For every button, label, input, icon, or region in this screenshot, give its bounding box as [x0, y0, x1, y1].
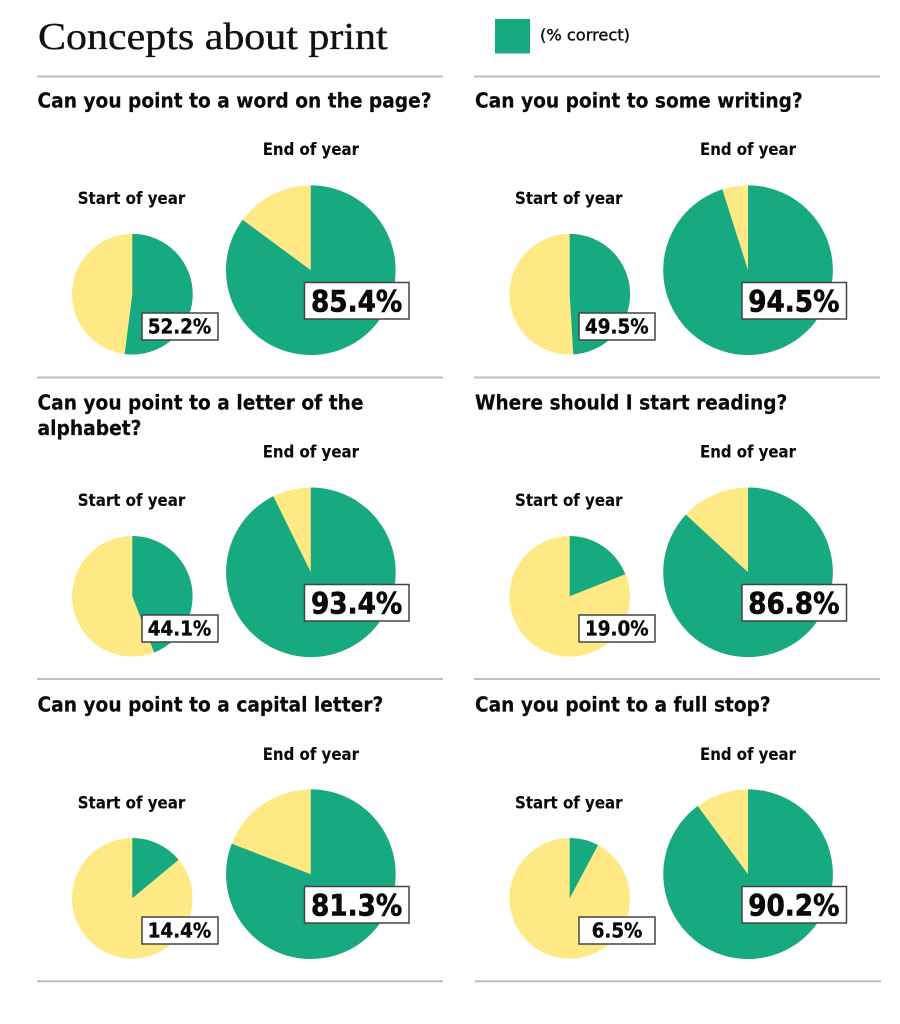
start of year label: Start of year	[515, 491, 623, 511]
heading: Can you point to a letter of the	[38, 391, 364, 415]
value: 14.4%: 14.4%	[148, 918, 211, 942]
end of year pie chart	[663, 789, 833, 959]
value: 94.5%: 94.5%	[748, 285, 840, 319]
end of year label: End of year	[700, 745, 797, 765]
value: 93.4%: 93.4%	[311, 587, 402, 621]
panel: word on the page	[38, 88, 432, 355]
heading: Can you point to a capital letter?	[38, 692, 383, 716]
end of year label: End of year	[700, 442, 797, 462]
start of year pie chart	[509, 234, 630, 354]
end of year pie chart	[663, 185, 833, 355]
end of year label: End of year	[263, 140, 360, 160]
end of year pie chart	[226, 789, 396, 959]
end of year pie chart	[663, 487, 833, 657]
legend: (% correct)	[540, 26, 630, 44]
heading: Can you point to some writing?	[475, 88, 803, 112]
panel: where to start reading	[475, 391, 846, 657]
legend	[495, 19, 630, 54]
end of year label: End of year	[700, 140, 797, 160]
value: 49.5%: 49.5%	[585, 314, 649, 338]
start of year label: Start of year	[78, 189, 186, 209]
heading: Where should I start reading?	[475, 391, 787, 415]
end of year label: End of year	[263, 745, 360, 765]
value: 86.8%: 86.8%	[748, 587, 840, 621]
panel: some writing	[475, 88, 846, 355]
value: 90.2%: 90.2%	[748, 889, 840, 923]
start of year label: Start of year	[515, 189, 623, 209]
panel: capital letter	[38, 692, 409, 959]
value: 85.4%: 85.4%	[311, 285, 402, 319]
value: 81.3%: 81.3%	[311, 889, 402, 923]
value: 52.2%: 52.2%	[148, 314, 211, 338]
start of year pie chart	[509, 838, 630, 959]
end of year pie chart	[226, 185, 396, 355]
value: 6.5%: 6.5%	[592, 918, 642, 942]
title: Concepts about print	[38, 16, 388, 58]
start of year label: Start of year	[515, 793, 623, 813]
heading: Can you point to a word on the page?	[38, 88, 432, 112]
value: 6.5%	[579, 917, 655, 944]
value: 44.1%: 44.1%	[148, 616, 211, 640]
start of year pie chart	[72, 838, 193, 959]
end of year label: End of year	[263, 442, 360, 462]
start of year pie chart	[72, 234, 193, 354]
end of year pie chart	[226, 487, 396, 657]
start of year pie chart	[509, 536, 630, 657]
value: 19.0%: 19.0%	[585, 616, 649, 640]
start of year pie chart	[72, 536, 193, 657]
panel: full stop	[475, 692, 846, 959]
heading: Can you point to a full stop?	[475, 692, 771, 716]
panel: letter of the alphabet	[38, 391, 409, 657]
start of year label: Start of year	[78, 793, 186, 813]
start of year label: Start of year	[78, 491, 186, 511]
heading second line: alphabet?	[38, 416, 142, 440]
